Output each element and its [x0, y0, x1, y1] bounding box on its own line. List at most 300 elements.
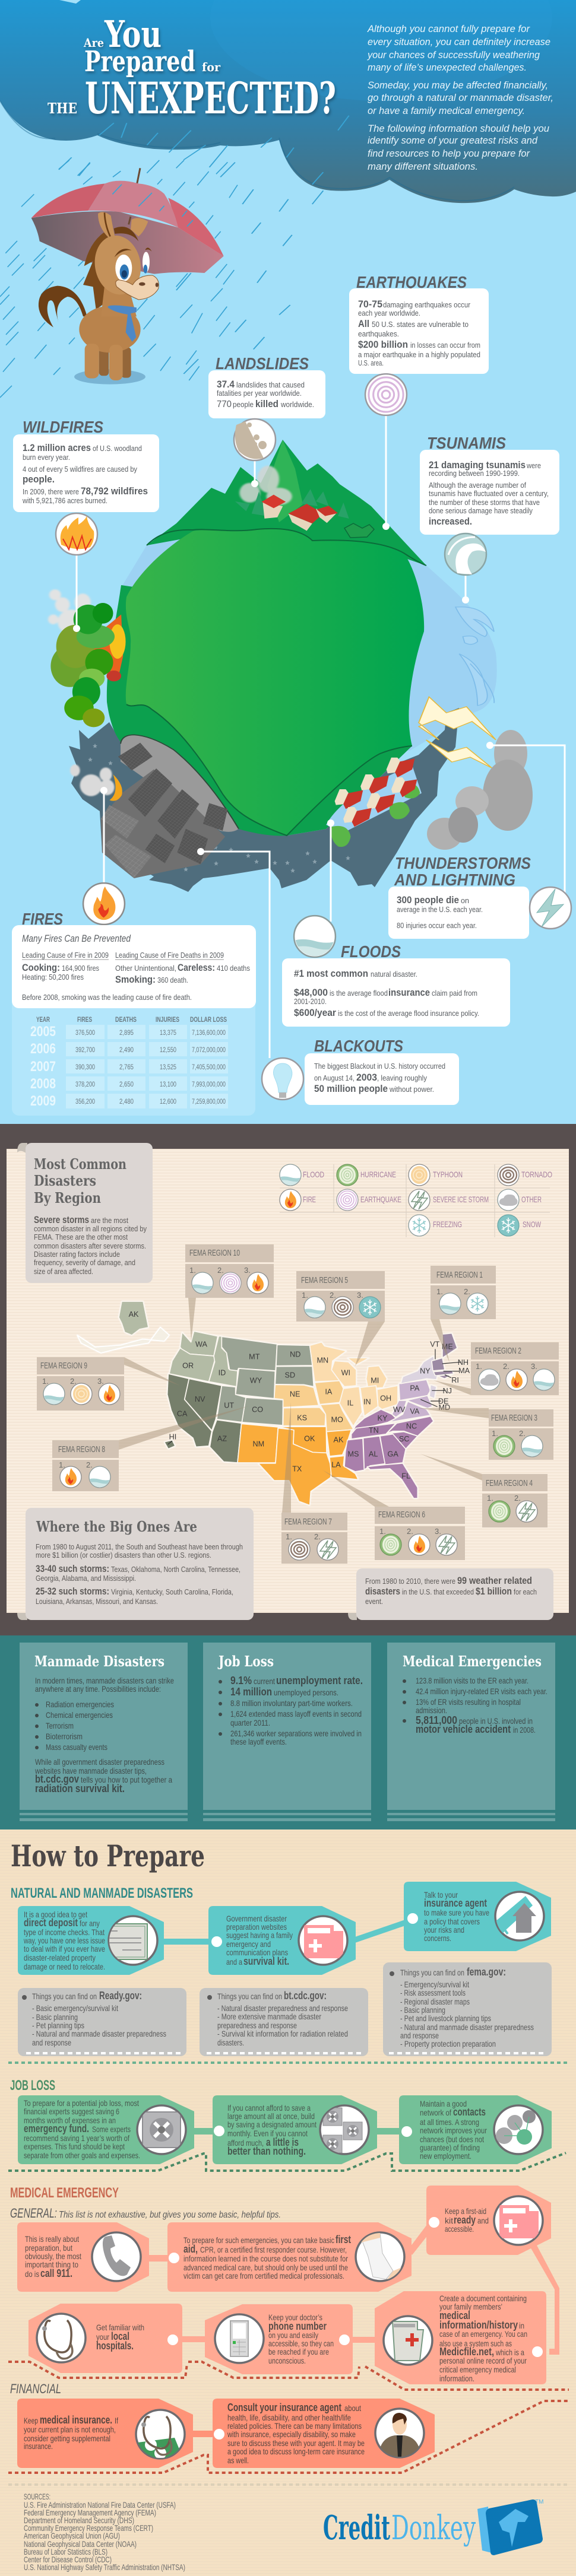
tag: insurance agent: a policy that covers — [424, 1917, 480, 1926]
FEMA region 5: 1. — [302, 1291, 308, 1300]
fires table: 376,500 — [75, 1028, 95, 1037]
fires table: 7,405,500,000 — [192, 1063, 226, 1071]
fires panel: Cooking: — [22, 962, 60, 973]
fires panel: 410 deaths — [217, 964, 250, 973]
mascot: donkey with umbrella — [31, 168, 224, 385]
tsunamis panel: recording between 1990-1999. — [429, 469, 520, 478]
tag: emergency fund — [18, 2095, 194, 2164]
legend: FREEZING — [433, 1219, 462, 1229]
tag: contacts: new employment. — [420, 2151, 471, 2161]
panel: most common disasters: size of area affected. — [34, 1267, 93, 1276]
panel: most common disasters: Disaster rating factors include — [34, 1250, 120, 1259]
tag: first aid: first — [336, 2234, 351, 2245]
intro text: Although you cannot fully prepare for — [367, 23, 530, 34]
landslides panel — [208, 354, 325, 418]
sources: American Geophysical Union (AGU) — [24, 2531, 120, 2540]
tag: consult insurance agent: about — [344, 2403, 361, 2413]
heading: natural and manmade disasters: NATURAL AND MANMADE DISASTERS — [11, 1885, 193, 1901]
panel: medical emergencies: 5,811,000 — [416, 1714, 457, 1726]
panel: ready.gov: - Pet planning tips — [32, 2021, 84, 2030]
tag: doctor's phone number: Keep your doctor’s — [268, 2313, 322, 2322]
tag: local hospitals: hospitals. — [96, 2340, 134, 2352]
blackouts panel: 2003 — [356, 1072, 377, 1083]
tag: direct deposit — [18, 1906, 164, 1975]
map state labels — [129, 1310, 470, 1480]
fires table: 7,072,000,000 — [192, 1046, 226, 1054]
panel: job loss: current — [254, 1676, 275, 1686]
panel: most common disasters: Severe storms — [34, 1214, 89, 1225]
globe: tsunami wave — [455, 607, 494, 706]
tag: emergency fund: emergency fund. — [24, 2123, 89, 2135]
map state labels: ND — [290, 1351, 300, 1359]
tag: first aid: information learned in the course does not substitute for — [183, 2254, 348, 2263]
panel: job loss: 261,346 worker separations were involved in — [230, 1729, 362, 1738]
heading: fires: FIRES — [22, 910, 63, 928]
icon: bills — [320, 2105, 369, 2154]
icon: lightning — [530, 887, 571, 929]
tag: direct deposit: for any — [80, 1918, 100, 1928]
FEMA region 10 — [185, 1244, 274, 1298]
FEMA region 7: 1. — [286, 1532, 292, 1541]
earthquakes panel: in losses can occur from — [410, 341, 480, 350]
panel: most common disasters: common disaster in all regions cited by — [34, 1224, 147, 1233]
tag: insurance agent: insurance agent — [424, 1897, 487, 1909]
tag: call 911: do is — [25, 2269, 39, 2279]
tag: insurance agent: Talk to your — [424, 1890, 458, 1900]
tag: consult insurance agent: as well. — [227, 2456, 249, 2465]
panel: fema.gov: and response — [400, 2031, 439, 2040]
floods panel: natural disaster. — [371, 970, 417, 979]
panel: manmade disasters: In modern times, manmade disasters can strike — [35, 1676, 174, 1685]
wildfires panel: people. — [23, 474, 55, 485]
tag: emergency fund: expenses. This fund should be kept — [24, 2142, 125, 2151]
sources: Department of Homeland Security (DHS) — [24, 2515, 134, 2525]
icon: wildfire — [56, 513, 97, 632]
map state labels: IL — [347, 1399, 353, 1408]
tsunamis panel: were — [526, 462, 541, 470]
icon: phone — [92, 2232, 141, 2281]
map state labels: NY — [420, 1367, 431, 1376]
FEMA region 9 — [37, 1357, 124, 1411]
fires table: 390,300 — [75, 1063, 95, 1071]
panel: job loss: 1,624 extended mass layoff events in second — [230, 1709, 362, 1719]
map state labels: AK — [129, 1310, 139, 1319]
heading: most common disasters by region — [34, 1155, 126, 1206]
tag: save monthly: a little is — [266, 2136, 299, 2148]
panel: manmade disasters: tells you how to put together a — [81, 1775, 172, 1784]
sources: U.S. Fire Administration National Fire Data Center (USFA) — [24, 2500, 176, 2510]
heading: floods: FLOODS — [341, 942, 401, 961]
tag: government websites: Government disaster — [226, 1914, 287, 1923]
panel: ready.gov: - Basic planning — [32, 2012, 78, 2022]
FEMA region 3: 2. — [519, 1429, 526, 1438]
globe: land and water — [69, 440, 497, 892]
panel: manmade disasters: Bioterrorism — [46, 1732, 83, 1741]
FEMA region 10: 1. — [189, 1266, 196, 1275]
fires panel: Smoking: — [115, 974, 156, 985]
blackouts panel: 50 million people — [314, 1083, 388, 1094]
tag: government websites: communication plans — [226, 1948, 288, 1957]
tag: call 911: important thing to — [25, 2260, 78, 2269]
globe: city — [70, 735, 239, 878]
thunderstorms panel: 300 people die — [397, 894, 459, 906]
icon: contact phone — [215, 2314, 264, 2363]
panel: most common disasters — [17, 1143, 153, 1283]
map state labels: WA — [195, 1340, 208, 1348]
earthquakes panel: U.S. area. — [358, 359, 384, 367]
FEMA region 5: 2. — [330, 1291, 336, 1300]
legend: TYPHOON — [433, 1170, 463, 1179]
map state labels: NV — [195, 1395, 205, 1403]
tag: medical insurance — [17, 2399, 193, 2468]
tag: government websites: suggest having a family — [226, 1930, 293, 1940]
tag: government websites: survival kit. — [243, 1955, 289, 1967]
wildfires panel: In 2009, there were — [23, 488, 79, 496]
tag: call 911: call 911. — [40, 2267, 72, 2279]
panel: where the big ones are: Virginia, Kentucky, South Carolina, Florida, — [111, 1587, 233, 1596]
panel: most common disasters: common disasters after severe storms. — [34, 1241, 146, 1250]
rain — [0, 160, 238, 398]
panel: medical emergencies: people in U.S. involved in — [459, 1716, 533, 1726]
FEMA region 6: FEMA REGION 6 — [378, 1510, 425, 1520]
icon: savings — [137, 2105, 186, 2154]
connectors: medical emergency — [145, 2222, 559, 2355]
tag: contacts: chances (but does not — [420, 2135, 484, 2144]
tag: insurance agent — [404, 1882, 551, 1951]
blackouts connector dot — [197, 848, 204, 855]
FEMA region 5 — [296, 1271, 385, 1322]
fires table: 2007 — [30, 1059, 56, 1075]
intro text: Someday, you may be affected financially, — [368, 80, 548, 91]
fires table: 392,700 — [75, 1046, 95, 1054]
intro text: many of life’s unexpected challenges. — [368, 62, 527, 73]
earthquakes panel: 50 U.S. states are vulnerable to — [372, 320, 469, 329]
icon: first-aid kit — [299, 1916, 347, 1965]
tag: first-aid kit: and — [477, 2216, 489, 2225]
FEMA region 9: 1. — [42, 1377, 49, 1386]
globe: flooded coastal houses — [326, 758, 422, 847]
tsunamis panel: 21 damaging tsunamis — [429, 460, 526, 471]
fires panel: Many Fires Can Be Prevented — [22, 933, 131, 944]
tag: emergency fund: recommend saving 1 year’s worth of — [24, 2133, 129, 2143]
teal section background — [0, 1635, 576, 1829]
panel: manmade disasters: While all government disaster preparedness — [35, 1757, 164, 1767]
map paper — [7, 1149, 569, 1613]
heading: most common disasters by region: By Region — [34, 1189, 101, 1206]
FEMA region 5: 3. — [357, 1291, 363, 1300]
earthquakes panel: 70-75 — [358, 299, 382, 310]
landslides panel: 37.4 — [217, 379, 235, 390]
FEMA region 2: 3. — [531, 1362, 537, 1371]
tag: save monthly — [213, 2095, 377, 2164]
thunderstorms panel: on — [461, 896, 469, 905]
tag: first-aid kit: Keep a first-aid — [445, 2206, 486, 2216]
tag: contacts: Maintain a good — [420, 2099, 467, 2108]
tag: first aid: CPR, or a certified first responder course. However, — [200, 2245, 347, 2254]
tsunamis panel: increased. — [429, 516, 472, 527]
FEMA region 6: 3. — [435, 1527, 441, 1536]
tag: medical history: Medicfile.net, — [439, 2346, 494, 2358]
intro text: every situation, you can definitely increase — [368, 36, 550, 47]
tag: contacts — [399, 2095, 552, 2164]
panel: bt.cdc.gov: bt.cdc.gov: — [284, 1990, 327, 2002]
tag: medical history: information. — [439, 2374, 474, 2383]
panel: where the big ones are: 25-32 such storms: — [36, 1586, 109, 1597]
map state labels: KS — [297, 1414, 307, 1422]
thunderstorms panel: average in the U.S. each year. — [397, 905, 483, 914]
fires table: 12,600 — [160, 1097, 176, 1106]
FEMA region 3: FEMA REGION 3 — [491, 1413, 537, 1423]
tag: call 911: obviously, the most — [25, 2251, 81, 2261]
tsunamis panel: Although the average number of — [429, 481, 526, 490]
floods connector — [330, 823, 331, 922]
title: You — [104, 12, 162, 56]
globe: wildfire trees — [48, 589, 126, 727]
tag: emergency fund: separate from other goals and expenses. — [24, 2151, 140, 2160]
panel: where the big ones are: Texas, Oklahoma, North Carolina, Tennessee, — [111, 1565, 240, 1574]
floods panel — [282, 942, 510, 1027]
FEMA region 2: 1. — [476, 1362, 482, 1371]
map state labels: CO — [252, 1405, 263, 1414]
tag: call 911: This is really about — [25, 2234, 79, 2244]
map state labels: OK — [304, 1435, 315, 1443]
panel: bt.cdc.gov: - More extensive manmade disaster — [217, 2012, 321, 2021]
panel: medical emergencies: 123.8 million visits to the ER each year. — [416, 1676, 528, 1685]
panel: medical emergencies: motor vehicle accident — [416, 1723, 511, 1735]
FEMA region 2: FEMA REGION 2 — [475, 1346, 521, 1356]
tag: consult insurance agent: health, life, disability, and other health/life — [227, 2413, 351, 2422]
map state labels: NM — [252, 1440, 264, 1449]
callout: billion-dollar disasters: event. — [365, 1597, 383, 1606]
fires panel: Before 2008, smoking was the leading cause of fire death. — [22, 993, 192, 1002]
panel: bt.cdc.gov: preparedness and response — [217, 2021, 297, 2030]
tag: medical insurance: insurance. — [24, 2441, 53, 2451]
fires table: 12,550 — [160, 1046, 176, 1054]
FEMA region 7: FEMA REGION 7 — [284, 1517, 332, 1527]
blackouts panel — [305, 1037, 459, 1105]
tag: first aid — [167, 2222, 412, 2292]
panel: job loss — [203, 1643, 371, 1821]
icon: network — [494, 2105, 543, 2154]
tag: consult insurance agent — [213, 2399, 435, 2468]
tag: government websites — [208, 1906, 356, 1975]
heading: job loss: JOB LOSS — [10, 2078, 55, 2094]
heading: most common disasters by region: Most Common — [34, 1155, 126, 1173]
floods connector dot — [327, 820, 334, 827]
panel: where the big ones are: more $1 billion (or costlier) disasters than other U.S. regions. — [36, 1551, 211, 1559]
FEMA region 7 — [281, 1513, 347, 1564]
tag: doctor's phone number — [205, 2304, 353, 2374]
FEMA region 4: 2. — [514, 1494, 521, 1503]
floods panel: #1 most common — [294, 968, 368, 979]
wildfires panel: with 5,921,786 acres burned. — [22, 497, 107, 505]
blackouts panel: without power. — [389, 1085, 434, 1094]
landslides panel: 770 — [217, 399, 232, 409]
tag: first aid: To prepare for such emergencies, you can take basic — [183, 2235, 334, 2245]
panel: ready.gov: Ready.gov: — [99, 1990, 142, 2002]
panel: fema.gov: - Basic planning — [400, 2005, 445, 2015]
tag: first aid: aid, — [183, 2243, 198, 2255]
map state labels: WY — [250, 1377, 262, 1385]
map state labels: SD — [285, 1371, 295, 1380]
FEMA region 4 — [482, 1474, 547, 1527]
earthquakes panel: All — [358, 319, 369, 329]
tag: government websites: emergency and — [226, 1939, 271, 1949]
fires connector dot — [100, 787, 107, 794]
icon: stethoscope and money — [136, 2410, 185, 2464]
panel: job loss: Job Loss — [217, 1653, 274, 1670]
map state labels: NE — [290, 1390, 300, 1398]
fires panel: Leading Cause of Fire Deaths in 2009 — [115, 951, 224, 960]
legend: OTHER — [521, 1195, 542, 1204]
blackouts connector — [201, 852, 270, 1058]
earthquakes panel — [349, 273, 489, 374]
map state labels: TN — [369, 1427, 379, 1435]
tag: direct deposit: damage or need to relocate. — [24, 1962, 105, 1971]
map state labels: MS — [347, 1450, 359, 1459]
tag: government websites: preparation websites — [226, 1922, 287, 1932]
map state labels: MT — [249, 1353, 260, 1361]
panel: manmade disasters: radiation survival kit. — [35, 1783, 125, 1794]
title: Prepared — [84, 45, 195, 78]
panel: most common disasters: FEMA. These are the other most — [34, 1233, 128, 1241]
fires table: 2,895 — [119, 1028, 134, 1037]
panel: ready.gov: Things you can find on — [32, 1991, 97, 2001]
tag: medical history: information/history — [439, 2319, 518, 2331]
earthquakes panel: a major earthquake in a highly populated — [358, 351, 480, 359]
sources: Center for Disease Control (CDC) — [24, 2555, 112, 2564]
icon: light bulb — [262, 1058, 303, 1100]
fires table: 356,200 — [75, 1097, 95, 1106]
connectors: natural and manmade — [160, 1918, 409, 1945]
fires table: 2,480 — [119, 1097, 134, 1106]
heading: wildfires: WILDFIRES — [23, 418, 103, 436]
wildfires panel: 78,792 wildfires — [81, 486, 148, 497]
icon: stethoscope — [37, 2314, 86, 2362]
panel: where the big ones are: From 1980 to August 2011, the South and Southeast have been through — [36, 1542, 243, 1551]
fires panel: Leading Cause of Fire in 2009 — [22, 951, 109, 960]
map state labels: NJ — [443, 1387, 452, 1395]
panel: job loss: 8.8 million involuntary part-time workers. — [230, 1698, 353, 1708]
landslides panel: landslides that caused — [236, 381, 305, 389]
fires table: FIRES — [77, 1015, 92, 1024]
legend: FIRE — [303, 1195, 316, 1204]
panel: bt.cdc.gov: disasters. — [217, 2038, 244, 2047]
fires table: 378,200 — [75, 1080, 95, 1088]
panel: manmade disasters: anywhere at any time. Possibilities include: — [35, 1684, 161, 1694]
panel: ready.gov: - Basic emergency/survival kit — [32, 2003, 118, 2013]
icon: tsunami — [445, 533, 486, 603]
FEMA region 1: 2. — [464, 1287, 470, 1296]
sources: SOURCES: — [24, 2492, 50, 2501]
heading: thunderstorms and lightning — [394, 854, 531, 889]
FEMA region 7: 2. — [314, 1532, 321, 1541]
panel: manmade disasters: Mass casualty events — [46, 1742, 107, 1752]
tag: contacts: at all times. A strong — [420, 2117, 479, 2127]
tag: emergency fund: To prepare for a potential job loss, most — [24, 2098, 139, 2108]
FEMA region 8: 1. — [59, 1460, 65, 1469]
panel: fema.gov: fema.gov: — [467, 1966, 506, 1978]
earthquakes panel: earthquakes. — [358, 330, 399, 338]
map state labels: OH — [380, 1395, 391, 1403]
sources — [24, 2492, 185, 2572]
icon: check — [106, 1916, 157, 1965]
panel: fema.gov: Things you can find on — [400, 1968, 464, 1977]
icon: insurance agent — [375, 2409, 424, 2458]
map state labels: MD — [438, 1403, 450, 1412]
FEMA region 6: 2. — [407, 1527, 413, 1536]
panel: fema.gov: - Risk assessment tools — [400, 1988, 466, 1997]
legend: EARTHQUAKE — [360, 1195, 401, 1204]
map state labels: ID — [219, 1369, 226, 1377]
heading: how to prepare: How to Prepare — [11, 1838, 205, 1873]
wildfires panel: 4 out of every 5 wildfires are caused by — [23, 465, 138, 474]
tag: first-aid kit: kit — [445, 2216, 453, 2225]
FEMA region 2: 2. — [503, 1362, 509, 1371]
logo: CreditDonkey: Donkey — [391, 2509, 476, 2548]
sources: U.S. National Highway Safety Traffic Administration (NHTSA) — [24, 2562, 185, 2572]
legend — [278, 1164, 552, 1237]
sources: Bureau of Labor Statistics (BLS) — [24, 2547, 107, 2556]
panel: where the big ones are: Georgia, Alabama, and Mississippi. — [36, 1574, 136, 1583]
FEMA region 6: 1. — [379, 1527, 386, 1536]
fires table: 13,525 — [160, 1063, 176, 1071]
map state labels: IA — [325, 1388, 333, 1396]
fires panel — [12, 910, 256, 1116]
blackouts panel: , leaving roughly — [377, 1073, 427, 1082]
region pointers — [119, 1298, 489, 1513]
panel: fema.gov: - Natural and manmade disaster preparedness — [400, 2022, 534, 2032]
callout: billion-dollar disasters: $1 billion — [476, 1586, 512, 1597]
dark section background — [0, 1124, 576, 1635]
earthquakes panel: $200 billion — [358, 339, 408, 350]
tag: medical insurance: Keep — [24, 2416, 38, 2425]
tag: call 911: preparation, but — [25, 2243, 72, 2253]
panel: where the big ones are: 33-40 such storms: — [36, 1563, 109, 1574]
map state labels: DE — [438, 1397, 448, 1405]
sources: Federal Emergency Management Agency (FEMA) — [24, 2508, 156, 2517]
intro text: The following information should help you — [368, 123, 550, 134]
storm cloud — [0, 0, 576, 203]
tag: medical insurance: consider getting supplemental — [24, 2434, 110, 2443]
FEMA region 10: 2. — [217, 1266, 224, 1275]
fires table: 13,375 — [160, 1028, 176, 1037]
thunderstorm connector dot — [486, 742, 493, 749]
floods panel: $600/year — [294, 1007, 336, 1018]
panel: manmade disasters — [20, 1643, 188, 1821]
FEMA region 1: FEMA REGION 1 — [436, 1270, 483, 1280]
tag: first-aid kit — [426, 2186, 551, 2255]
fires table: 13,100 — [160, 1080, 176, 1088]
FEMA region 3 — [489, 1409, 553, 1460]
sky background — [0, 0, 576, 1124]
tag: consult insurance agent: sure to discuss these with your agent. It may be — [227, 2438, 365, 2448]
panel: where the big ones are: Where the Big Ones Are — [36, 1518, 197, 1535]
tag: medical history: in — [519, 2321, 524, 2330]
tag: save monthly: by saving a designated amount — [227, 2120, 317, 2129]
fires table: 2,765 — [119, 1063, 134, 1071]
tag: save monthly: large amount all at once, build — [227, 2111, 315, 2121]
panel: job loss: unemployed persons. — [274, 1688, 338, 1697]
map state labels: HI — [169, 1433, 176, 1441]
tag: consult insurance agent: Consult your insurance agent — [227, 2402, 341, 2413]
fires table: INJURIES — [156, 1015, 179, 1024]
globe: mountain village — [235, 466, 349, 531]
map state labels: LA — [331, 1460, 341, 1469]
heading: landslides: LANDSLIDES — [216, 354, 309, 373]
wildfires panel: 1.2 million acres — [23, 443, 91, 453]
FEMA region 4: 1. — [487, 1494, 493, 1503]
